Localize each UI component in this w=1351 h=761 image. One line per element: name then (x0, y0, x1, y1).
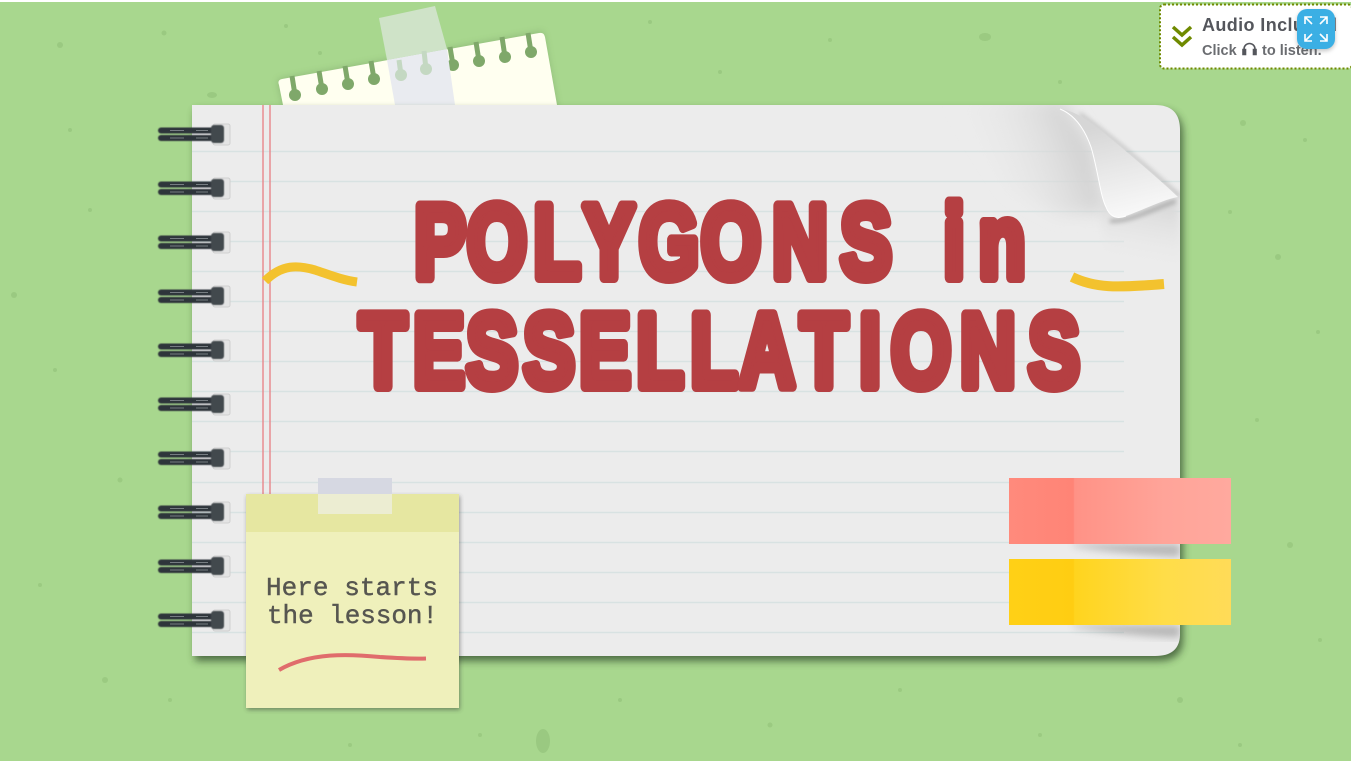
yellow squiggle left (265, 267, 357, 282)
paper holes (289, 33, 537, 101)
audio hint end: to listen. (1262, 43, 1322, 59)
audio hint: Click (1202, 43, 1238, 59)
yellow squiggle right (1072, 277, 1164, 286)
sticky note text: Here starts (266, 573, 438, 603)
icon: double chevron (1173, 27, 1191, 45)
ruled lines (192, 152, 1180, 632)
tape on sticky note (318, 478, 392, 514)
red underline (279, 655, 426, 670)
sticky note (246, 478, 460, 710)
fullscreen button (1297, 9, 1335, 51)
sticky note text: the lesson! (267, 601, 438, 631)
tape on back paper (379, 6, 455, 105)
title: POLYGONS in (414, 184, 1026, 300)
title (360, 184, 1080, 409)
notebook page (192, 105, 1183, 661)
title: TESSELLATIONS (360, 293, 1080, 409)
spiral binding (158, 124, 230, 631)
audio callout (1160, 4, 1351, 68)
yellow tab (1009, 559, 1231, 625)
coral tab (1009, 478, 1231, 544)
audio heading: Audio Included (1202, 15, 1337, 35)
bookmark tabs (1009, 478, 1231, 638)
page curl (1021, 105, 1180, 230)
margin lines (263, 105, 270, 495)
icon: expand arrows (1305, 17, 1327, 41)
sticky note text (266, 573, 438, 631)
back torn paper (278, 32, 557, 110)
icon: headphones (1243, 44, 1256, 54)
